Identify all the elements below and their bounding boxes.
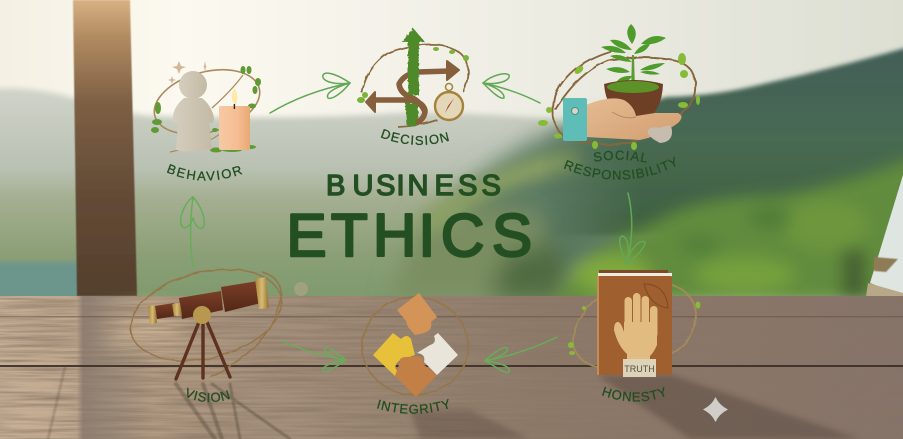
cuff bbox=[563, 98, 587, 141]
label: integrity: INTEGRITY bbox=[377, 398, 449, 414]
node: integrity bbox=[362, 293, 468, 397]
candle bbox=[219, 88, 250, 150]
node: honesty bbox=[568, 270, 700, 377]
moss arrow upper bbox=[402, 28, 425, 95]
arrow: social responsibility to honesty bbox=[620, 193, 645, 264]
leaves bbox=[151, 66, 261, 152]
vine ring bbox=[362, 45, 468, 127]
arrow: behavior to decision bbox=[270, 73, 350, 113]
label: behavior: BEHAVIOR bbox=[166, 164, 242, 181]
wooden hand bbox=[614, 293, 658, 364]
truth tag: TRUTH bbox=[624, 364, 655, 374]
node: decision bbox=[357, 28, 469, 127]
book bbox=[597, 270, 672, 375]
teal water band left bbox=[0, 260, 83, 296]
title line: business: BUSINESS bbox=[326, 170, 501, 202]
rope ring bbox=[121, 255, 291, 377]
puzzle piece: white bbox=[417, 333, 458, 375]
label: vision: VISION bbox=[187, 388, 230, 402]
arrow: social responsibility to decision bbox=[483, 74, 540, 103]
hand bbox=[586, 98, 682, 140]
vine leaves bbox=[357, 47, 469, 103]
node: behavior bbox=[147, 59, 267, 152]
arrow: vision to behavior bbox=[181, 197, 204, 266]
label: responsibility: RESPONSIBILITY bbox=[564, 156, 676, 180]
bowl bbox=[604, 80, 663, 121]
wooden s arrow bbox=[366, 61, 459, 122]
puzzle piece: yellow bbox=[373, 333, 415, 376]
label: honesty: HONESTY bbox=[602, 386, 664, 402]
bokeh dot bbox=[294, 282, 308, 296]
white panel at right edge bbox=[866, 175, 903, 297]
label: decision: DECISION bbox=[380, 128, 449, 146]
wooden post bbox=[73, 0, 137, 296]
wooden table bbox=[0, 296, 903, 439]
sparkles bbox=[168, 61, 207, 84]
node: social responsibility bbox=[538, 24, 700, 150]
puzzle piece: brown bbox=[395, 356, 437, 397]
stone heart bbox=[648, 126, 672, 143]
labels bbox=[166, 128, 676, 414]
node: vision bbox=[121, 255, 291, 379]
puzzle piece: orange bbox=[397, 293, 437, 335]
plant bbox=[601, 24, 666, 90]
compass bbox=[435, 84, 463, 120]
tripod bbox=[176, 322, 230, 379]
vine ring bbox=[147, 59, 267, 152]
arrow: honesty to integrity bbox=[485, 337, 557, 373]
sparkle bbox=[703, 397, 728, 422]
arrow: vision to integrity bbox=[282, 341, 346, 372]
ring bbox=[362, 297, 468, 395]
label: social: SOCIAL bbox=[594, 150, 647, 163]
leaves on ring bbox=[538, 53, 700, 150]
figure bbox=[173, 71, 214, 151]
title line: ethics: ETHICS bbox=[286, 202, 532, 269]
moss arrow lower bbox=[405, 103, 418, 126]
vine ring bbox=[553, 50, 696, 144]
leaves bbox=[568, 302, 700, 355]
telescope bbox=[148, 277, 269, 324]
background: blurred hills landscape bbox=[0, 0, 903, 310]
ring bbox=[573, 285, 696, 367]
title bbox=[286, 170, 532, 269]
